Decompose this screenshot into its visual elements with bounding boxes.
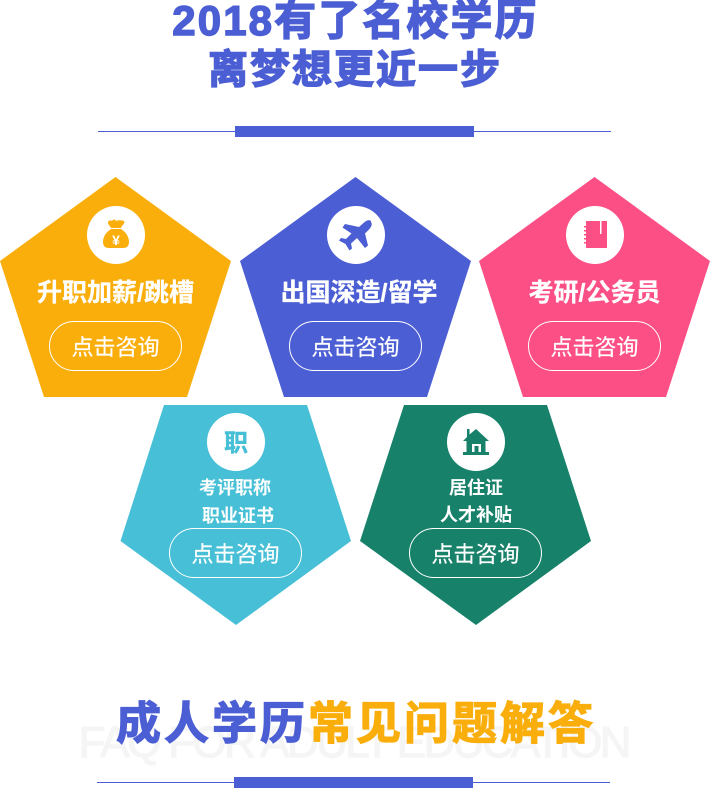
panel: study abroad: 出国深造/留学 [281,279,437,307]
panel: residence permit: 居住证 [449,478,503,498]
title [172,0,539,92]
panel: residence permit: 人才补贴 [440,505,512,525]
panel: professional titles: 考评职称 [199,478,271,498]
panel: salary: 升职加薪/跳槽 [37,279,194,307]
icon: airplane [339,220,372,250]
icon: money bag [103,220,129,248]
panel: professional titles [120,405,351,625]
panel: salary: 点击咨询 [71,335,160,360]
panel: professional titles: 点击咨询 [191,542,280,567]
panel: postgraduate exams [479,177,710,397]
panel: study abroad [240,177,471,397]
panel: residence permit [360,405,591,625]
panel: study abroad: 点击咨询 [311,335,400,360]
panel: residence permit: 点击咨询 [431,542,520,567]
title underline [98,126,611,137]
icon: house [463,429,489,455]
panel: salary [0,177,231,397]
section underline [97,777,610,788]
watermark text: FAQ FOR ADULT EDUCATION [78,718,632,767]
icon: money bag: ¥ [112,232,120,248]
icon: zhi character: 职 [224,430,248,457]
section heading: 成人学历常见问题解答 [116,698,596,749]
icon: notebook [584,221,607,248]
panel: postgraduate exams: 考研/公务员 [529,279,660,307]
panel: professional titles: 职业证书 [202,506,274,526]
panel: postgraduate exams: 点击咨询 [550,335,639,360]
title: 离梦想更近一步 [208,48,502,92]
